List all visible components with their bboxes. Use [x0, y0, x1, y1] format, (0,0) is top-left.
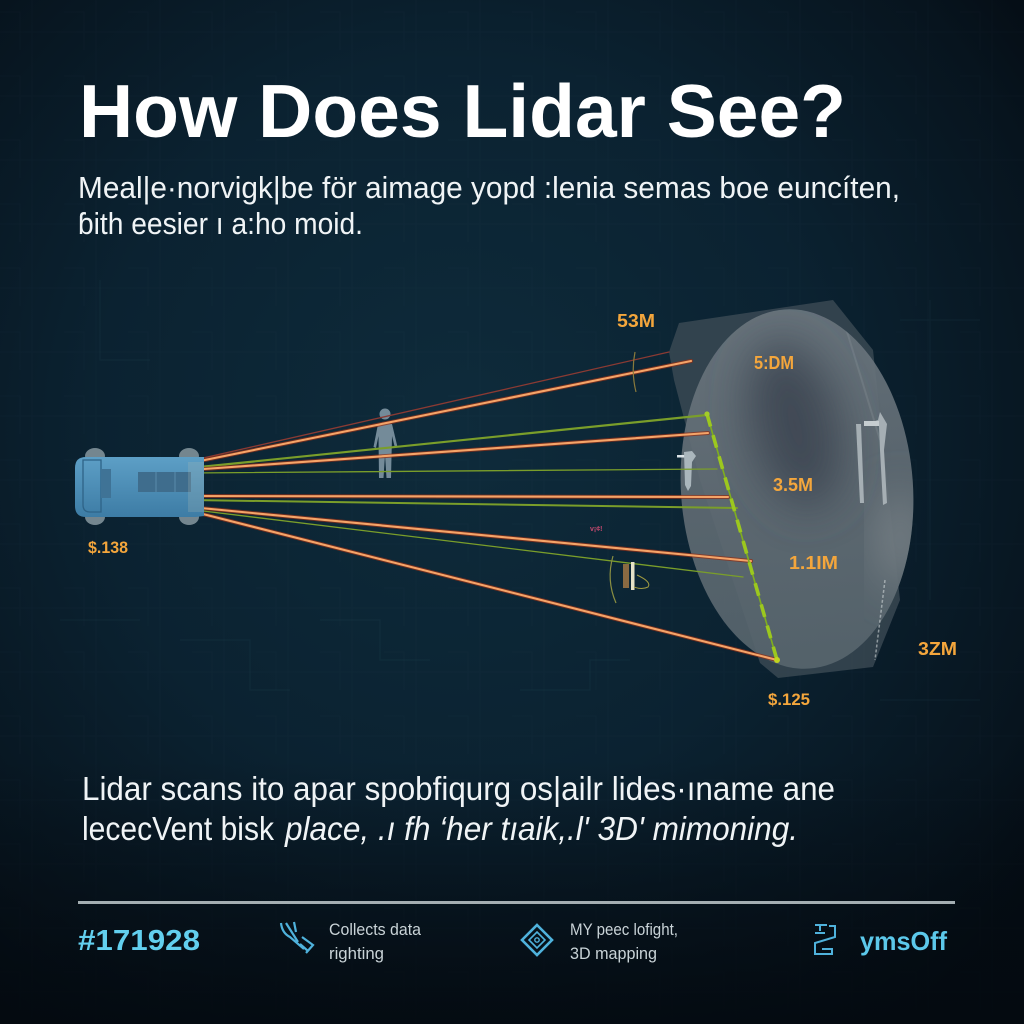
footer divider — [78, 901, 955, 904]
feature: 3D mapping — [570, 921, 678, 963]
beam group: green returns — [190, 415, 743, 577]
distance labels: $.125 — [768, 690, 810, 709]
laser beams — [190, 352, 777, 660]
icon: left handle detail — [677, 451, 696, 491]
distance labels: 1.1IM — [789, 553, 838, 573]
feature: collects data: righting — [329, 945, 384, 963]
explanation text — [82, 770, 835, 847]
distance labels — [88, 311, 957, 709]
wheels — [85, 448, 199, 525]
pedestrian figure — [374, 408, 398, 478]
tiny pink marker text: v¡¢! — [590, 526, 602, 533]
distance labels: 53M — [617, 311, 655, 331]
explanation text: lececVent bisk — [82, 810, 274, 847]
distance labels: 3.5M — [773, 475, 813, 495]
distance labels: 3ZM — [918, 639, 957, 659]
feature: 3D mapping: 3D mapping — [570, 945, 657, 963]
icon: data collection — [281, 922, 313, 953]
beam group: orange glow — [190, 361, 777, 660]
distance labels: 5:DM — [754, 353, 794, 373]
title: How Does Lidar See? — [79, 69, 846, 153]
feature: collects data: Collects data — [329, 921, 422, 939]
intro text: ɓith eesier ı a:ho moid. — [78, 206, 363, 241]
target object: scanned surface — [669, 300, 925, 678]
icon: right handle detail — [856, 412, 887, 505]
distance labels: $.138 — [88, 538, 128, 557]
footer code: #171928 — [78, 925, 200, 957]
vehicle body — [75, 457, 204, 517]
feature: 3D mapping: MY peec lofight, — [570, 921, 678, 939]
scan edge: green dashed contour — [704, 411, 780, 663]
brand name: ymsOff — [860, 926, 947, 956]
intro text — [78, 170, 900, 241]
feature: collects data — [329, 921, 422, 963]
icon: brand circuit — [815, 925, 835, 954]
explanation text: place, .ı fh ‘her tıaik,.l' 3D' mimoning. — [284, 810, 798, 847]
upper small marker — [633, 352, 636, 392]
explanation text: Lidar scans ito apar spobfiqurg os|ailr lides·ıname ane — [82, 770, 835, 807]
small scanned object — [610, 556, 649, 603]
icon: 3D mapping diamond — [522, 925, 552, 955]
lidar vehicle — [75, 448, 204, 525]
intro text: Meal|e·norvigk|be för aimage yopd :lenia semas boe euncíten, — [78, 170, 900, 205]
beam group: orange core — [190, 361, 777, 660]
beam: upper thin red — [190, 352, 669, 461]
